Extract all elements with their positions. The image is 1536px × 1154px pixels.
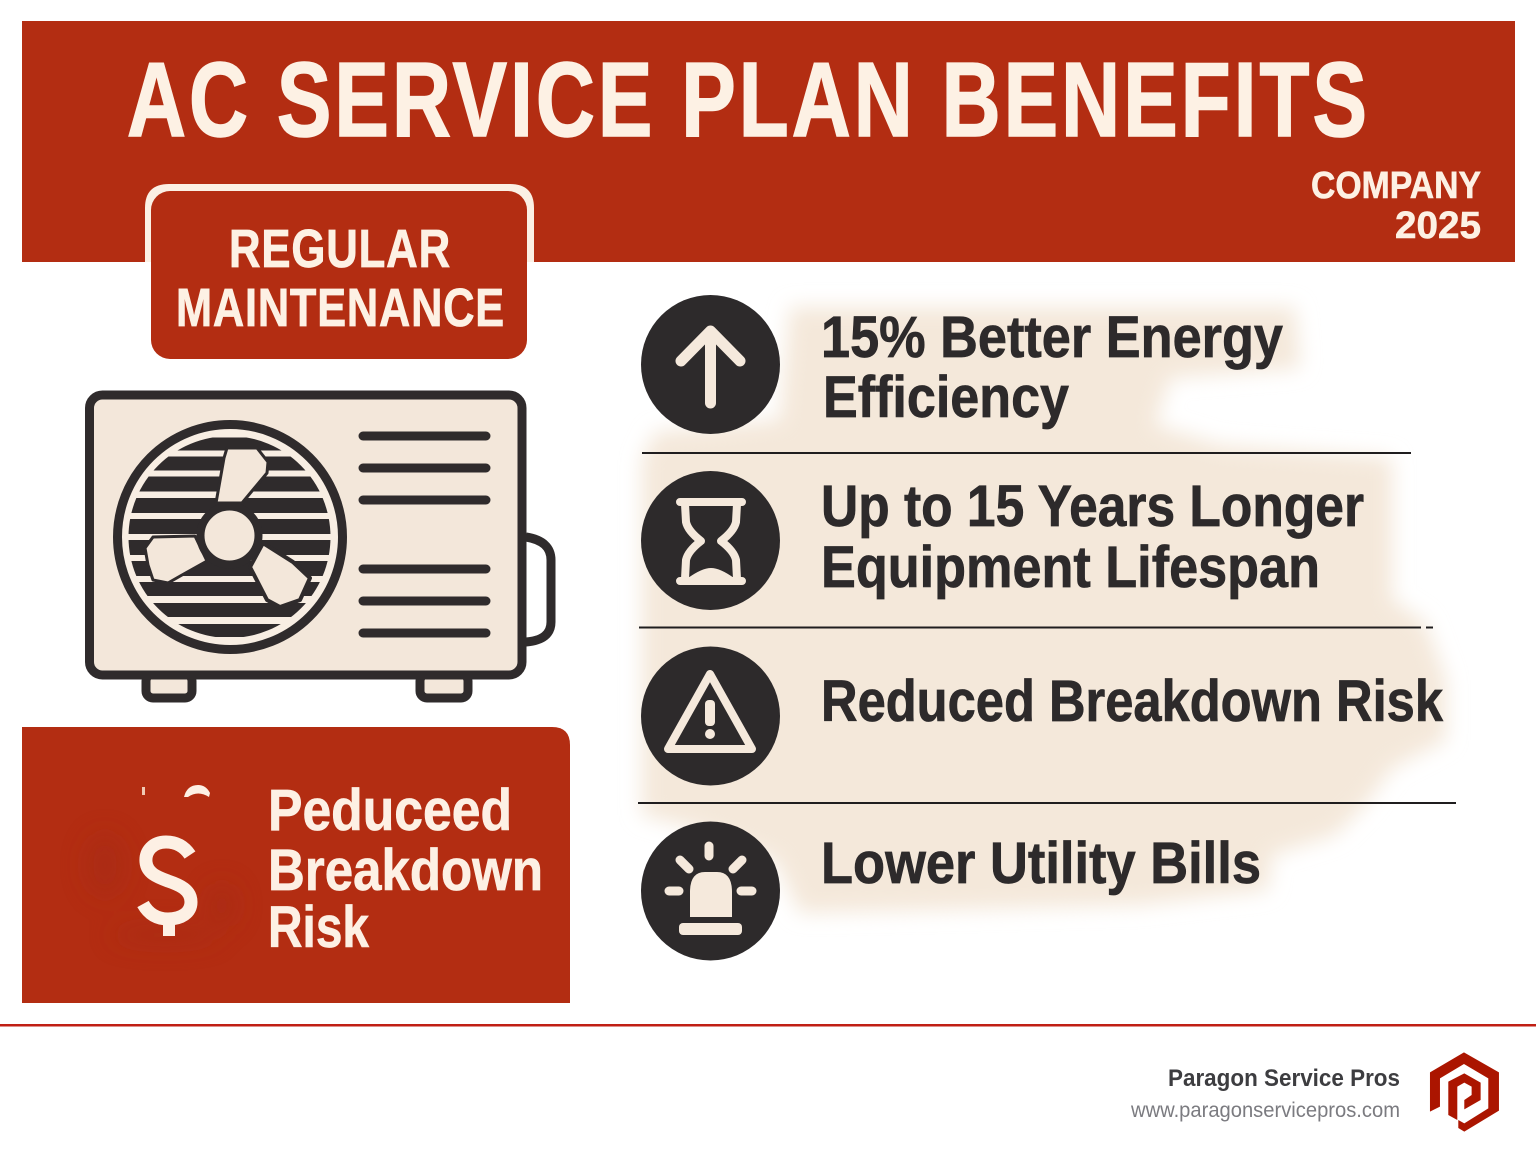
text: lifespan: Up to 15 Years Longer (821, 474, 1364, 539)
text: energy (821, 305, 1283, 430)
panel text: Risk (268, 895, 370, 960)
icon: company logo (1430, 1052, 1499, 1132)
row: utility bills (641, 822, 1261, 960)
icon: hourglass (641, 471, 780, 610)
panel text (268, 778, 543, 960)
row: breakdown risk (641, 646, 1444, 786)
row: lifespan (641, 471, 1364, 610)
header banner (22, 21, 1515, 262)
footer brand text (1130, 1065, 1400, 1122)
text: bills: Lower Utility Bills (821, 831, 1261, 896)
icon: warning triangle (641, 646, 780, 786)
footer brand text: Paragon Service Pros (1168, 1065, 1400, 1092)
badge: regular maintenance (145, 184, 534, 359)
row: energy efficiency (641, 295, 1283, 434)
footer brand text: www.paragonservicepros.com (1130, 1099, 1400, 1122)
text: lifespan (821, 474, 1364, 600)
panel: savings (22, 727, 570, 1003)
footer rule (0, 1024, 1536, 1026)
panel text: Breakdown (268, 838, 543, 903)
icon: up arrow (641, 295, 780, 434)
badge: regular maintenance: MAINTENANCE (176, 278, 505, 338)
icon: siren (641, 822, 780, 960)
text: energy: Efficiency (823, 365, 1069, 430)
icon: dollar sign (142, 785, 210, 936)
company and year: 2025 (1395, 205, 1481, 247)
icon: outdoor AC unit (90, 395, 551, 698)
company and year (1311, 165, 1481, 247)
badge: regular maintenance: REGULAR (229, 219, 451, 279)
panel text: Peduceed (268, 778, 512, 843)
text: breakdown: Reduced Breakdown Risk (821, 669, 1444, 734)
company and year: COMPANY (1311, 165, 1481, 207)
beige backdrop (642, 307, 1446, 913)
divider lines (638, 453, 1456, 803)
text: lifespan: Equipment Lifespan (821, 535, 1320, 600)
text: energy: 15% Better Energy (821, 305, 1283, 370)
